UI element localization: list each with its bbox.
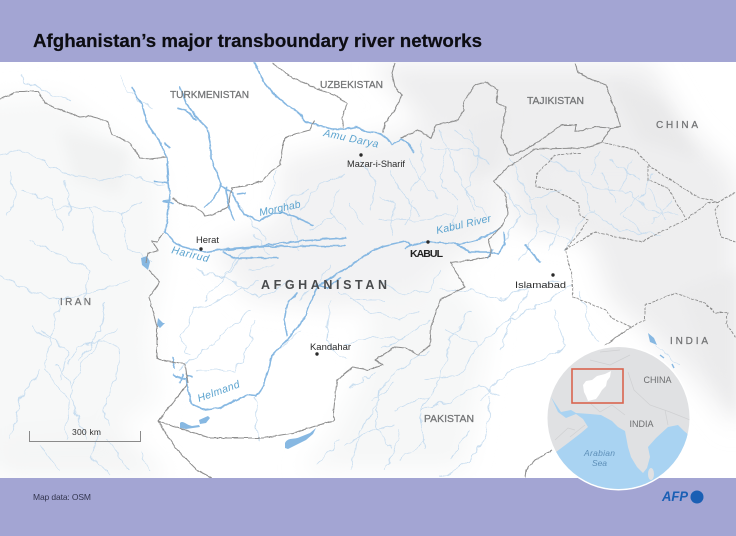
inset borders [555, 350, 690, 440]
footer band [0, 478, 736, 536]
labels: country names: PAKISTAN [424, 413, 474, 425]
labels: country names: UZBEKISTAN [320, 79, 383, 91]
river: Kabul River [368, 228, 540, 262]
AFP logo [661, 488, 704, 504]
inset locator map: Sea [592, 458, 607, 468]
river: Harirud [132, 88, 345, 258]
labels: cities: Herat [196, 235, 219, 246]
river: Helmand [187, 253, 368, 410]
AFP logo: AFP [661, 488, 689, 504]
lakes [141, 256, 674, 449]
labels: river names: Helmand [196, 378, 242, 405]
labels: river names: Amu Darya [321, 127, 380, 151]
label: AFGHANISTAN: AFGHANISTAN [261, 278, 387, 292]
labels: river names: Kabul River [435, 213, 493, 237]
river: Morghab [178, 87, 313, 225]
labels: country names: TURKMENISTAN [170, 89, 249, 101]
labels: cities [196, 153, 566, 356]
labels: country names: TAJIKISTAN [527, 95, 584, 107]
inset locator map: INDIA [630, 419, 654, 429]
scale bar [30, 427, 140, 442]
sea [551, 398, 688, 489]
river: Helmand delta [173, 358, 192, 382]
disputed borders [536, 142, 736, 337]
header band [0, 0, 736, 62]
Afghanistan locator [583, 371, 611, 401]
labels: cities: KABUL [410, 248, 444, 260]
scale bar: 300 km [72, 427, 101, 437]
title: Afghanistan’s major transboundary river networks [33, 30, 482, 51]
labels: country names: IRAN [60, 297, 91, 308]
inset locator map [548, 347, 690, 490]
thin tributaries [0, 75, 680, 478]
panel: map [0, 62, 736, 478]
major rivers [132, 63, 540, 410]
international borders [0, 63, 631, 478]
inset labels: CHINA [644, 375, 672, 385]
Sri Lanka [648, 468, 654, 480]
labels: country names: CHINA [656, 120, 698, 131]
labels: cities: Mazar-i-Sharif [347, 159, 405, 170]
labels: cities: Islamabad [515, 280, 566, 291]
inset locator map: Arabian [583, 448, 615, 458]
locator rectangle [572, 369, 623, 403]
labels: river names: Harirud [170, 244, 211, 265]
source note: Map data: OSM [33, 492, 91, 502]
labels: country names [60, 79, 708, 425]
labels: cities: Kandahar [310, 342, 351, 353]
river: Amu Darya [255, 63, 414, 152]
labels: country names: INDIA [670, 336, 708, 347]
labels: river names [170, 127, 493, 405]
labels: river names: Morghab [258, 198, 302, 219]
